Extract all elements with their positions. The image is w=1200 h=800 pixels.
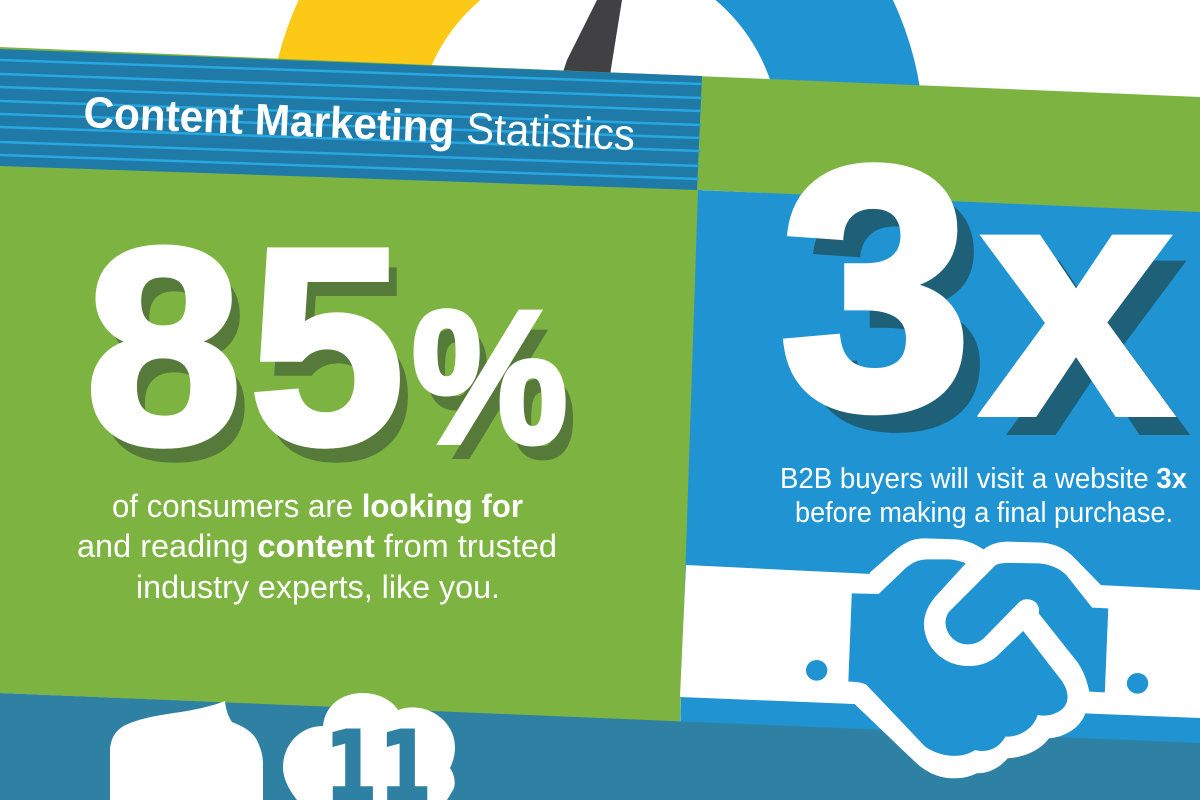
text: 85% description: and reading content from trusted: [77, 528, 557, 564]
big number: 85%: %: [412, 272, 567, 482]
icon: speech bubble: [110, 701, 263, 800]
panel: teal bottom: [0, 693, 1200, 800]
text: 85% description: industry experts, like you.: [136, 569, 500, 605]
icon: handshake: [806, 538, 1148, 778]
big number: 3x: 3: [780, 96, 971, 480]
title text: Content Marketing Statistics: [83, 88, 636, 160]
text: 85% description: of consumers are looking for: [112, 488, 523, 524]
big number: 85%: 8: [85, 191, 242, 503]
big number: 85%: [85, 191, 574, 503]
panel: blue 3x: [680, 190, 1200, 750]
white band behind handshake: [680, 565, 1200, 718]
gauge graphic at top: [268, 0, 924, 139]
text: 3x description: [780, 463, 1187, 529]
icon: cloud with number: [283, 693, 455, 800]
text: 85% description: [77, 488, 557, 605]
big number: 3x: [780, 96, 1190, 483]
text: 3x description: B2B buyers will visit a website 3x: [780, 463, 1187, 495]
big number: 85%: 5: [249, 191, 405, 503]
title banner: [0, 49, 702, 190]
big number: 3x: x: [982, 114, 1171, 483]
gauge needle: [563, 0, 622, 75]
text: 3x description: before making a final purchase.: [795, 497, 1173, 529]
